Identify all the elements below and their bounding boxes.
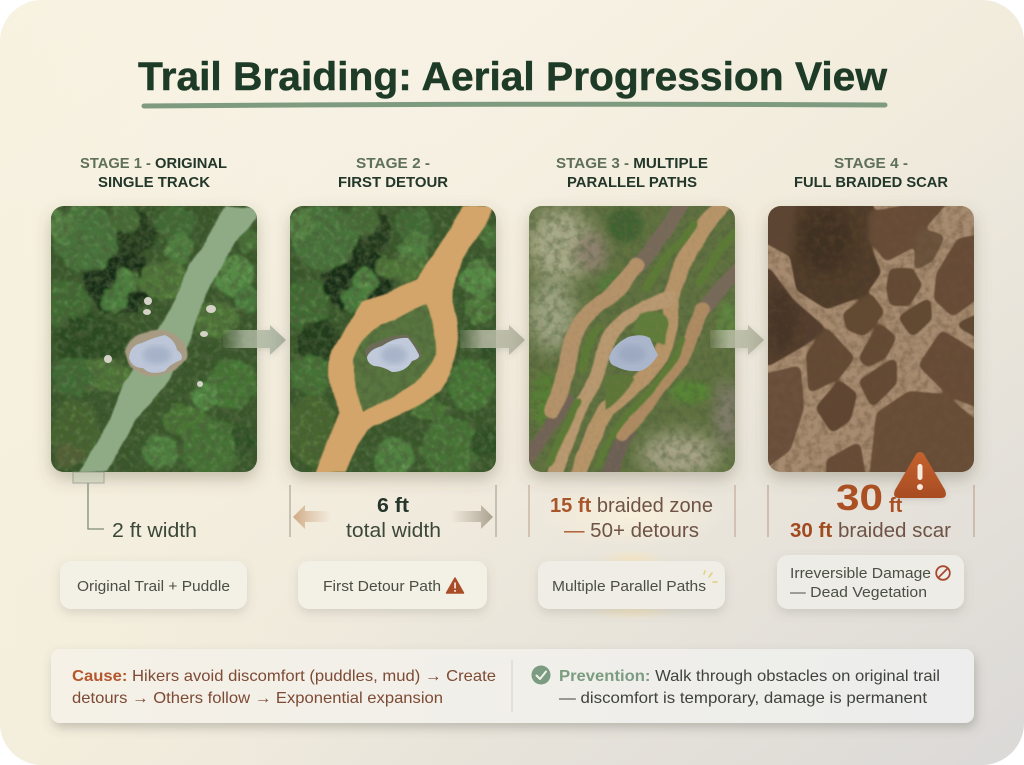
cause text	[72, 668, 496, 707]
arrow: stage 1 to 2	[223, 325, 286, 355]
card: original trail	[60, 561, 247, 609]
sandy paths	[552, 265, 637, 410]
stage 2 width measurement: total width	[346, 520, 441, 542]
stage 2 width measurement	[290, 485, 496, 542]
icon: warning triangle	[894, 452, 946, 498]
cause text: Cause: Hikers avoid discomfort (puddles, mud) → Create	[72, 668, 496, 685]
panel: stage 3 aerial image	[526, 200, 742, 478]
panel: stage 4 aerial image	[764, 202, 980, 478]
panel: cause and prevention	[51, 649, 974, 723]
card: irreversible damage: Irreversible Damage	[790, 565, 931, 582]
prevention text: — discomfort is temporary, damage is permanent	[559, 690, 928, 707]
puddle	[365, 335, 421, 372]
card: first detour	[298, 561, 487, 609]
vegetated island	[353, 303, 435, 412]
puddle	[125, 331, 188, 376]
title: Trail Braiding: Aerial Progression View	[138, 55, 888, 99]
arrow: stage 2 to 3	[460, 325, 525, 355]
stage 4 heading: STAGE 4 -	[834, 156, 908, 172]
panel: stage 2 aerial image	[280, 203, 503, 478]
card: multiple parallel paths: Multiple Parallel Paths	[552, 578, 706, 595]
stage 1 width bracket and label	[73, 472, 197, 542]
icon: check circle	[532, 666, 550, 684]
stage 1 heading: SINGLE TRACK	[98, 175, 211, 191]
card: multiple parallel paths	[538, 561, 725, 609]
stage 1 heading: STAGE 1 - ORIGINAL	[80, 156, 227, 172]
card: first detour: First Detour Path	[323, 578, 441, 595]
card: original trail: Original Trail + Puddle	[77, 578, 230, 595]
title underline	[144, 104, 885, 106]
stage 4 width measurement: ft	[889, 495, 903, 517]
sandy split path	[316, 206, 493, 472]
stage 4 heading	[794, 156, 949, 191]
stage 3 width measurement	[529, 485, 735, 542]
stage 2 heading: STAGE 2 -	[356, 156, 430, 172]
cause text: detours → Others follow → Exponential expansion	[72, 690, 443, 707]
stage 2 heading	[338, 156, 449, 191]
stage 2 width measurement: 6 ft	[377, 495, 409, 517]
stage 4 heading: FULL BRAIDED SCAR	[794, 175, 949, 191]
stage 1 width bracket and label: 2 ft width	[112, 520, 197, 542]
panel: stage 1 aerial image	[41, 203, 261, 478]
stage 1 heading	[80, 156, 227, 191]
card: irreversible damage	[777, 555, 964, 609]
stage 3 heading: STAGE 3 - MULTIPLE	[556, 156, 708, 172]
arrow: stage 3 to 4	[710, 325, 764, 355]
stage 3 heading	[556, 156, 708, 191]
stage 4 width measurement: 30	[836, 477, 883, 518]
stage 2 heading: FIRST DETOUR	[338, 175, 449, 191]
glow behind stage 3 card	[588, 549, 676, 620]
stage 3 width measurement: 15 ft braided zone	[550, 495, 713, 517]
stage 3 heading: PARALLEL PATHS	[567, 175, 697, 191]
stage 4 width measurement	[768, 477, 974, 542]
stage 3 width measurement: — 50+ detours	[564, 520, 699, 542]
trail	[79, 206, 256, 472]
puddle	[609, 335, 658, 371]
card: irreversible damage: — Dead Vegetation	[790, 584, 927, 601]
stage 4 width measurement: 30 ft braided scar	[790, 520, 951, 542]
prevention text: Prevention: Walk through obstacles on original trail	[559, 668, 940, 685]
glow behind stage 3 text	[537, 483, 727, 547]
prevention text	[559, 668, 940, 707]
dark worn tracks	[637, 200, 684, 268]
